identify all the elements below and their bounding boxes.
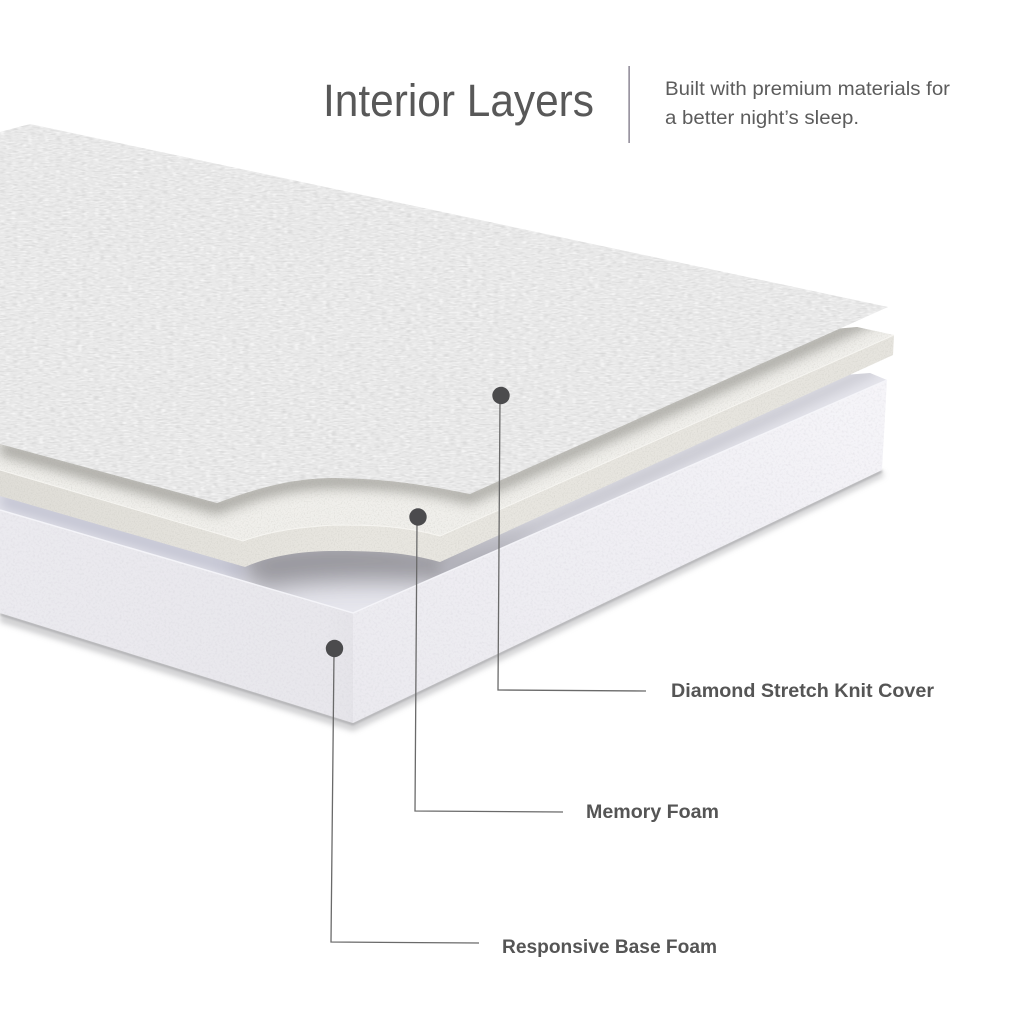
layer: diamond stretch knit cover [0,120,892,510]
foam layer shadow on base top [0,365,880,590]
callout: memory foam: Memory Foam [586,802,719,823]
layer: responsive base foam [0,365,890,725]
callout: diamond stretch knit cover [492,387,935,702]
cover shadow on memory foam [0,303,888,514]
subtitle: Built with premium materials for [665,78,951,100]
callout: responsive base foam: Responsive Base Foam [502,937,717,958]
layer: memory foam [0,320,900,570]
subtitle: a better night’s sleep. [665,107,859,129]
header divider [628,66,630,143]
memory foam front face [0,335,894,567]
callout: responsive base foam [326,640,717,958]
callout: diamond stretch knit cover: Diamond Stretch Knit Cover [671,681,935,702]
callout: memory foam [409,508,719,823]
ground shadow [0,470,884,731]
panel: mattress cutaway illustration [0,120,900,731]
base foam left face [0,510,353,723]
title: Interior Layers [323,75,594,126]
subtitle [665,78,951,129]
base foam top surface [0,373,887,613]
base foam right face [353,380,887,723]
memory foam top surface [0,327,894,541]
